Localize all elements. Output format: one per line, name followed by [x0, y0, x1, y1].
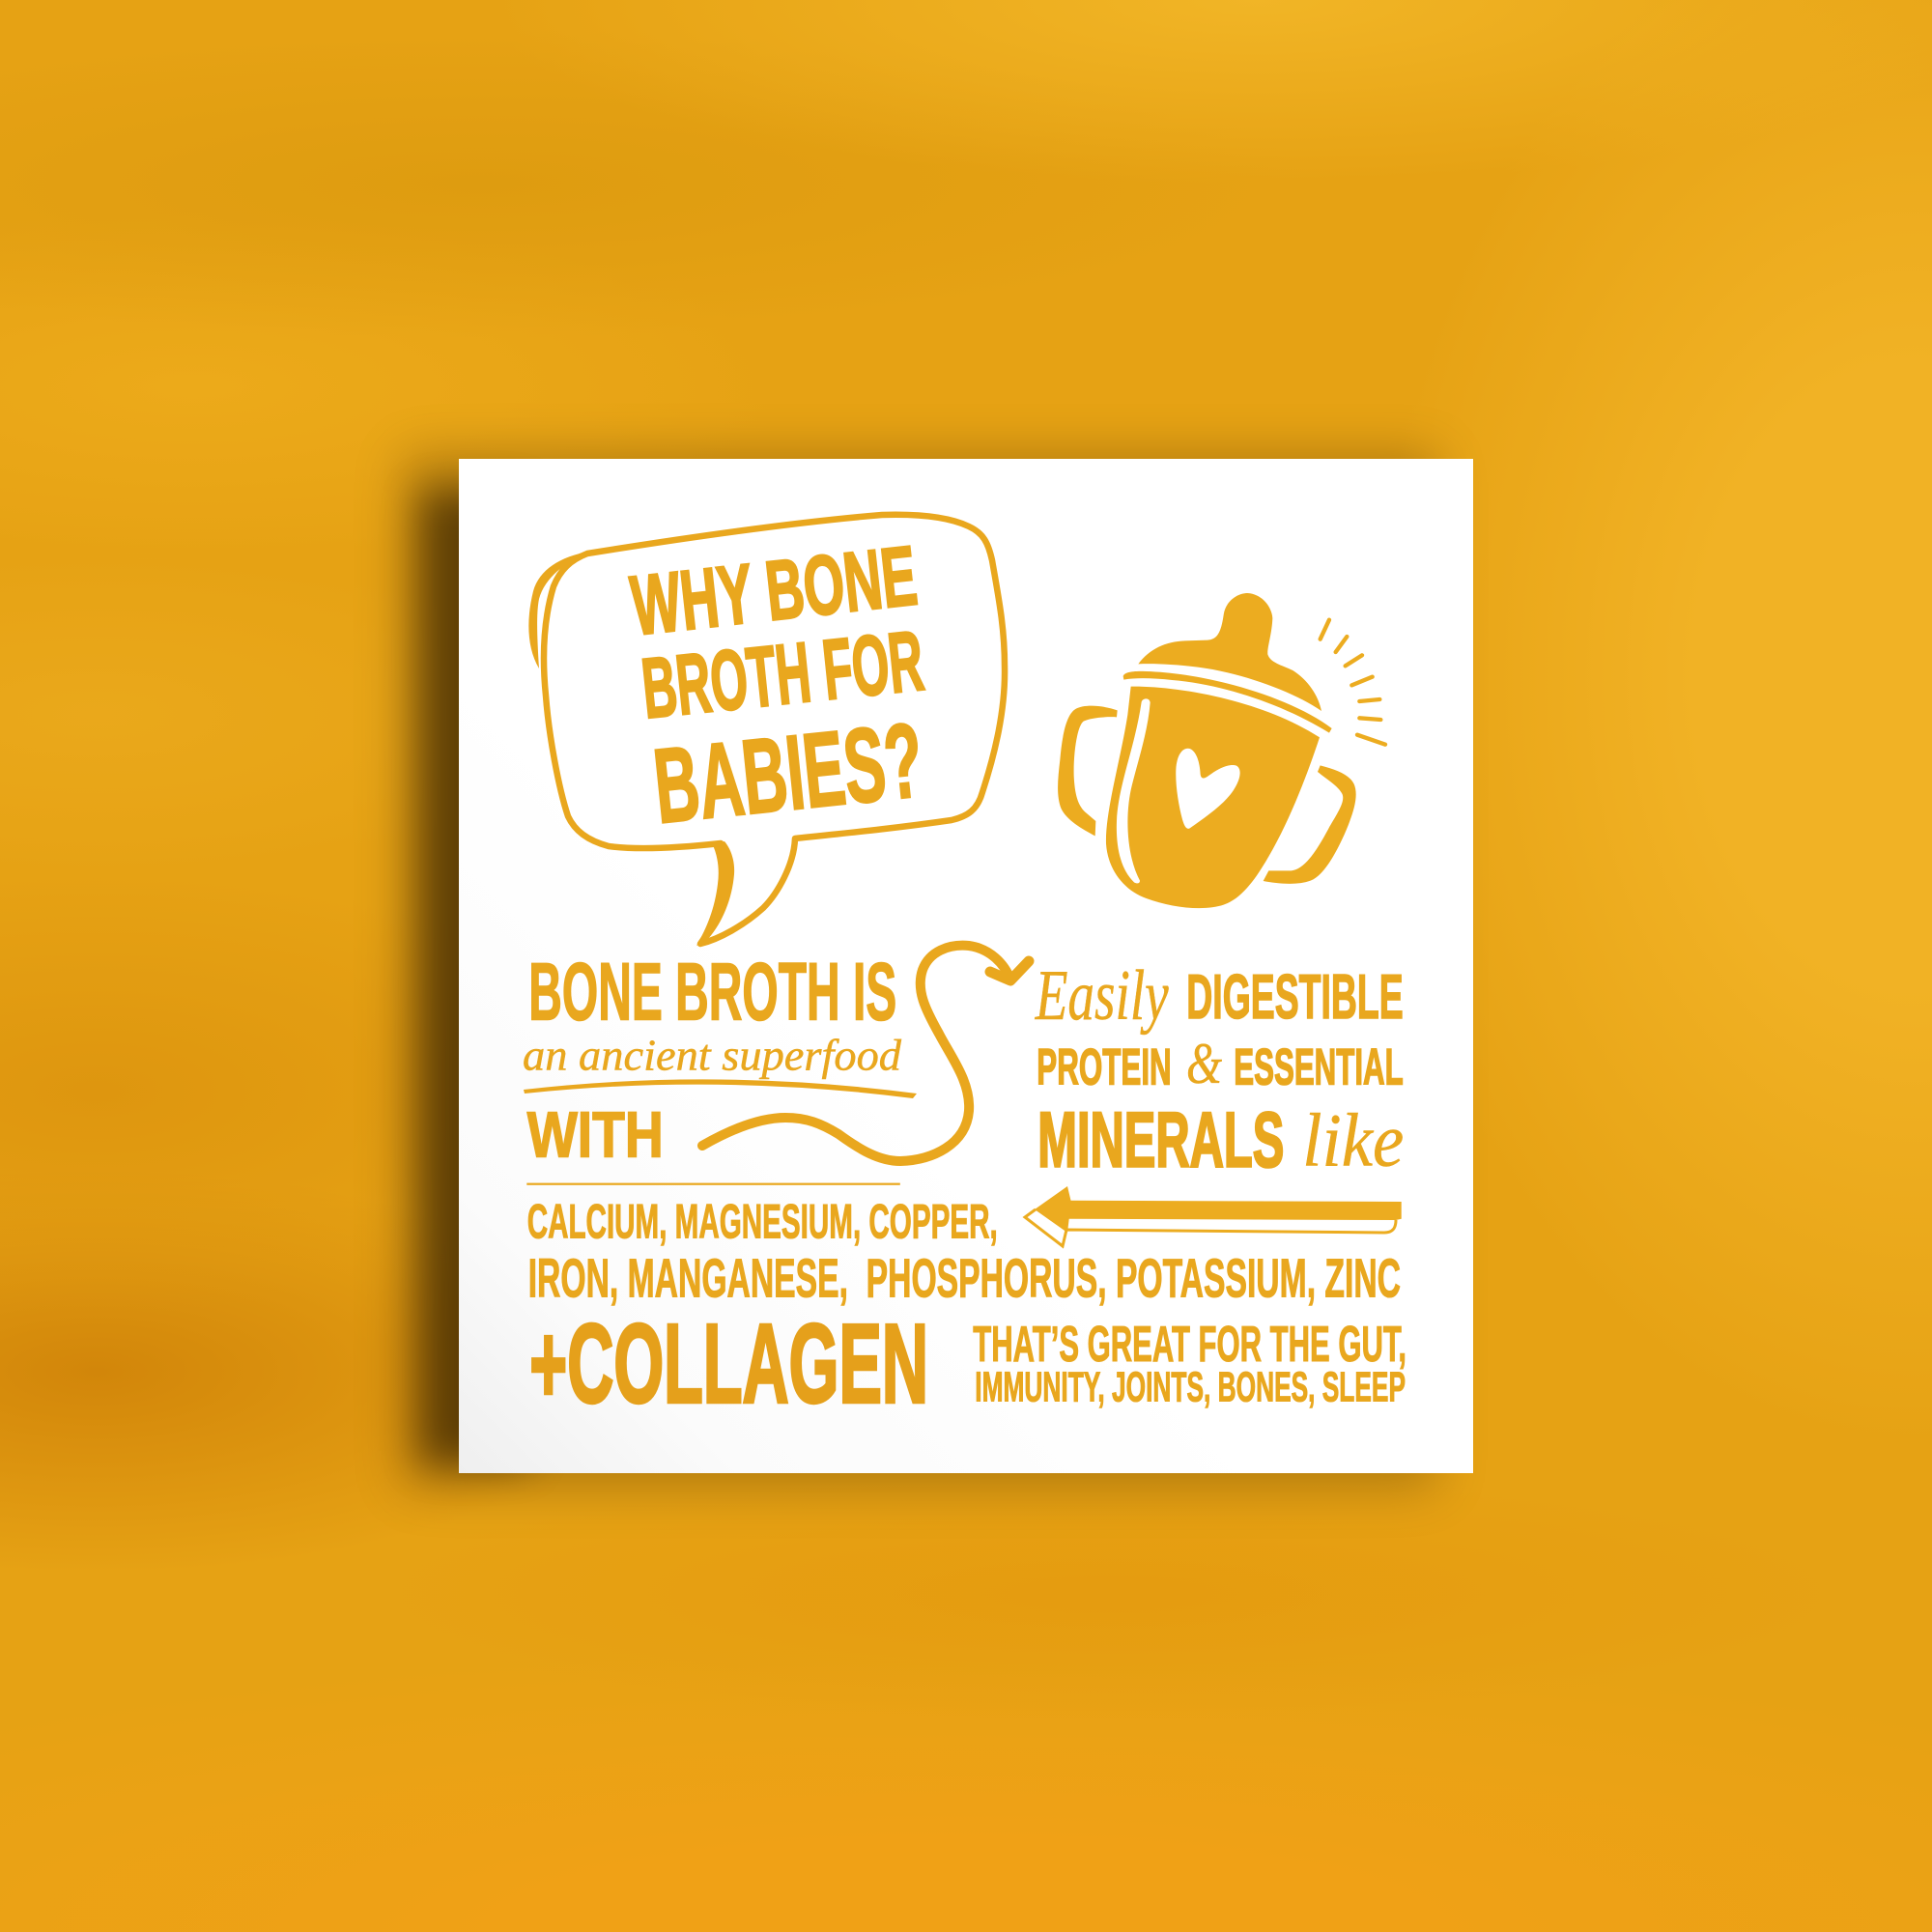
text: ampersand: & [1186, 1032, 1222, 1095]
heading line: babies: BABIES? [649, 701, 928, 846]
lid ring [1123, 671, 1332, 733]
text: great for the gut: THAT’S GREAT FOR THE GUT, [973, 1317, 1406, 1373]
speech bubble [528, 515, 1005, 946]
text: digestible: DIGESTIBLE [1186, 961, 1404, 1032]
text: minerals list line one: CALCIUM, MAGNESIUM, COPPER, [527, 1195, 998, 1249]
heading line: broth for: BROTH FOR [638, 612, 927, 736]
white card [459, 459, 1473, 1473]
left-pointing arrow [1025, 1186, 1402, 1246]
curly connector arrow [702, 946, 1029, 1161]
shine rays [1321, 620, 1385, 745]
text: like: like [1302, 1098, 1404, 1182]
text: plus collagen: +COLLAGEN [529, 1301, 928, 1427]
underline swash [524, 1079, 917, 1098]
left handle [1058, 706, 1118, 836]
text: minerals: MINERALS [1037, 1096, 1284, 1183]
heading line: why bone: WHY BONE [627, 528, 922, 653]
right handle [1264, 765, 1356, 884]
cup body [1106, 687, 1320, 908]
text: easily: Easily [1035, 956, 1169, 1036]
text: with: WITH [527, 1099, 664, 1171]
text: protein: PROTEIN [1037, 1039, 1172, 1096]
text: bone broth is: BONE BROTH IS [528, 947, 896, 1037]
text: essential: ESSENTIAL [1234, 1039, 1404, 1096]
divider rule [526, 1183, 900, 1185]
bottle lid and nipple [1138, 593, 1321, 711]
text: an ancient superfood: an ancient superfood [523, 1030, 902, 1080]
icon: sippy cup bottle with heart [1058, 593, 1385, 908]
text: immunity joints bones sleep: IMMUNITY, JOINTS, BONES, SLEEP [975, 1365, 1406, 1411]
